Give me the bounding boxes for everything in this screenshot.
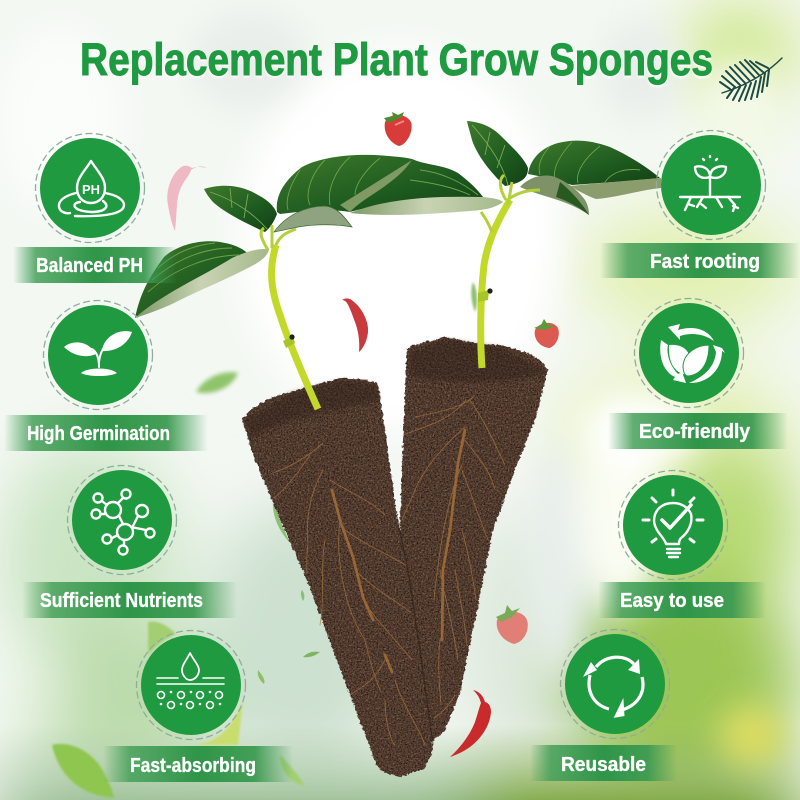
leaf stalks — [261, 225, 296, 250]
strawberry middle — [534, 319, 559, 348]
label: High Germination — [27, 423, 170, 445]
icon: absorbing water drop — [157, 653, 224, 708]
badge ring — [44, 300, 152, 410]
sponge seam — [397, 517, 433, 745]
leaf small upper left — [204, 186, 277, 232]
sponge right top shade — [409, 339, 546, 382]
badge ring — [618, 470, 728, 580]
chilli pink — [167, 166, 207, 231]
panel: Eco-friendly — [608, 298, 788, 449]
band — [530, 745, 677, 781]
chilli red — [342, 298, 368, 352]
stem node — [283, 336, 295, 348]
badge disc — [661, 135, 761, 235]
badge disc — [72, 470, 172, 570]
icon: recycling arrows — [583, 657, 643, 718]
panel: Fast-absorbing — [103, 630, 293, 782]
badge ring — [36, 134, 144, 242]
label: Balanced PH — [36, 255, 143, 277]
badge disc — [40, 138, 140, 238]
icon: sprout with roots — [680, 156, 740, 211]
panel: High Germination — [4, 300, 208, 451]
sponge front left — [242, 378, 433, 777]
roots left — [273, 443, 425, 745]
stem — [272, 245, 318, 409]
label: Reusable — [561, 754, 646, 776]
leaf lower left — [135, 241, 269, 318]
label: Eco-friendly — [639, 421, 751, 443]
sponges — [242, 337, 548, 777]
stem — [481, 200, 510, 368]
leaf big centre — [277, 155, 503, 215]
label: Easy to use — [620, 590, 724, 612]
seedling left — [135, 155, 503, 409]
badge ring — [560, 630, 670, 738]
icon: PH water drop — [59, 161, 124, 216]
band — [22, 582, 237, 618]
title: Replacement Plant Grow Sponges — [80, 34, 713, 85]
stem node — [478, 290, 489, 302]
strawberry pale — [496, 605, 528, 644]
badge disc — [48, 305, 148, 405]
icon: leaves with cycle arrows — [660, 324, 725, 383]
badge ring — [634, 298, 744, 408]
strawberry top — [384, 112, 412, 146]
badge disc — [639, 303, 739, 403]
seedling right — [467, 121, 661, 368]
icon: PH water drop: PH — [82, 182, 100, 197]
icon: fern leaf — [720, 58, 782, 101]
band — [4, 415, 208, 451]
label: Fast-absorbing — [130, 755, 256, 777]
panel: Reusable — [530, 630, 677, 781]
panel: Sufficient Nutrients — [22, 466, 237, 618]
panel: Fast rooting — [600, 130, 800, 278]
roots right — [402, 397, 505, 718]
label: Sufficient Nutrients — [40, 590, 203, 612]
band — [600, 243, 800, 278]
leaf stalks — [481, 175, 540, 232]
strawberries and chillies — [167, 112, 559, 757]
badge ring — [656, 130, 766, 240]
blurred floating leaves — [52, 282, 477, 798]
icon: molecule — [92, 490, 154, 554]
label: Fast rooting — [650, 251, 760, 273]
leaf pale front — [274, 206, 352, 232]
band — [103, 746, 293, 782]
badge disc — [565, 634, 665, 734]
icon: light bulb with tick — [643, 490, 703, 557]
badge ring — [68, 466, 176, 574]
sponge left top shade — [244, 380, 379, 438]
band — [608, 413, 788, 449]
panel: Easy to use — [598, 470, 766, 618]
leaf right large — [528, 141, 661, 199]
icon: sprout — [64, 331, 132, 376]
badge ring — [136, 630, 246, 740]
leaf upper — [467, 121, 528, 186]
chilli bottom — [450, 690, 491, 757]
band — [13, 247, 177, 283]
badge disc — [141, 635, 241, 735]
band — [598, 582, 766, 618]
panel: Balanced PH — [13, 134, 177, 283]
sponge back right — [400, 337, 548, 742]
badge disc — [623, 475, 723, 575]
leaf pale front — [520, 175, 589, 215]
